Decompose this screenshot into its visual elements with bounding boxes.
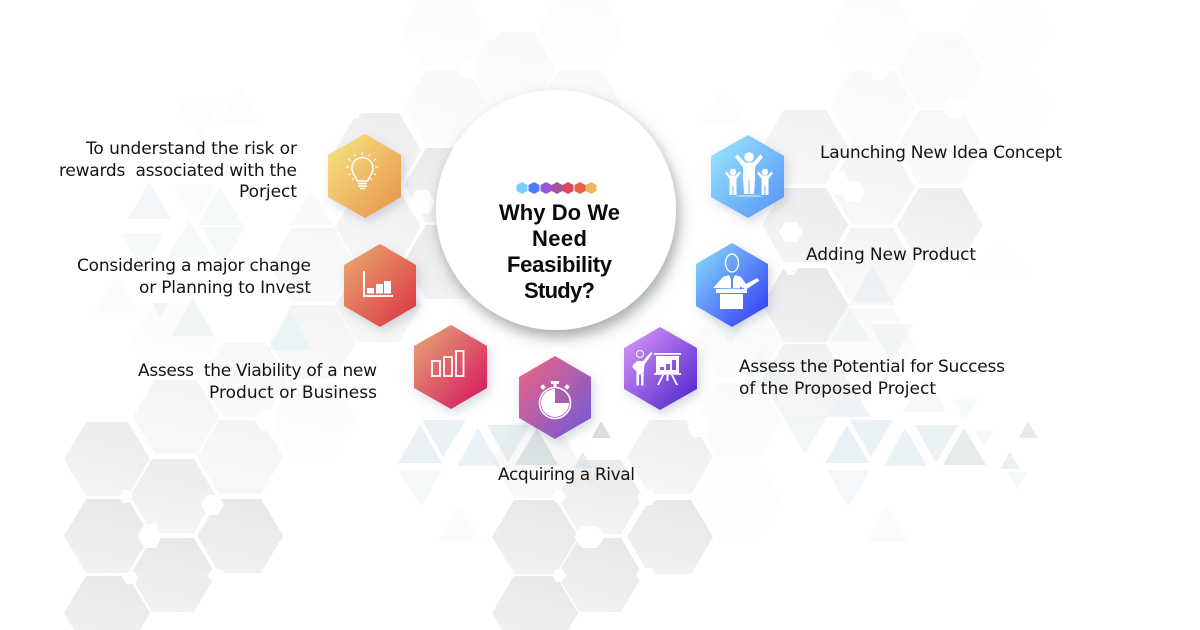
hexagon: outlined bars <box>414 325 487 409</box>
text: viability <box>138 361 377 403</box>
text: major change: or Planning to Invest <box>139 278 311 298</box>
icon: presenter and chart board <box>632 350 681 386</box>
icon: ascending outline bars <box>432 351 464 376</box>
icon: light bulb <box>346 152 378 188</box>
title: Need <box>532 226 587 251</box>
icon: speaker at podium <box>713 254 760 309</box>
icon: column chart <box>363 271 393 297</box>
text: acquiring a rival: Acquiring a Rival <box>498 465 635 485</box>
text: potential for success <box>739 357 1005 399</box>
hexagon: presenter with board <box>624 327 697 410</box>
text: risk or rewards <box>59 139 297 202</box>
text: risk or rewards: Porject <box>239 182 297 202</box>
title <box>499 200 620 303</box>
title: Study? <box>524 278 595 303</box>
text: viability: Product or Business <box>209 383 377 403</box>
hexagon: three raised-arm people <box>711 135 784 218</box>
hexagon: bar chart with axes <box>344 244 416 327</box>
text: adding new product: Adding New Product <box>806 245 976 265</box>
title: Why Do We <box>499 200 620 225</box>
text: major change: Considering a major change <box>77 256 311 276</box>
decorative small hexagon row <box>516 182 596 194</box>
text: risk or rewards: rewards associated with the <box>59 161 297 181</box>
text: potential for success: of the Proposed Project <box>739 379 936 399</box>
title: Feasibility <box>507 252 613 277</box>
text: potential for success: Assess the Potential for Success <box>739 357 1005 377</box>
icon: stopwatch <box>540 381 570 418</box>
text: launching new idea: Launching New Idea Concept <box>820 143 1062 163</box>
hexagon: stopwatch <box>519 356 591 439</box>
text: viability: Assess the Viability of a new <box>138 361 377 381</box>
hexagon: speaker at podium <box>696 243 768 327</box>
central circle <box>436 90 676 330</box>
icon: group of people <box>725 152 773 197</box>
text: major change <box>77 256 311 298</box>
hexagon: light bulb <box>328 134 401 218</box>
text: risk or rewards: To understand the risk or <box>85 139 297 159</box>
